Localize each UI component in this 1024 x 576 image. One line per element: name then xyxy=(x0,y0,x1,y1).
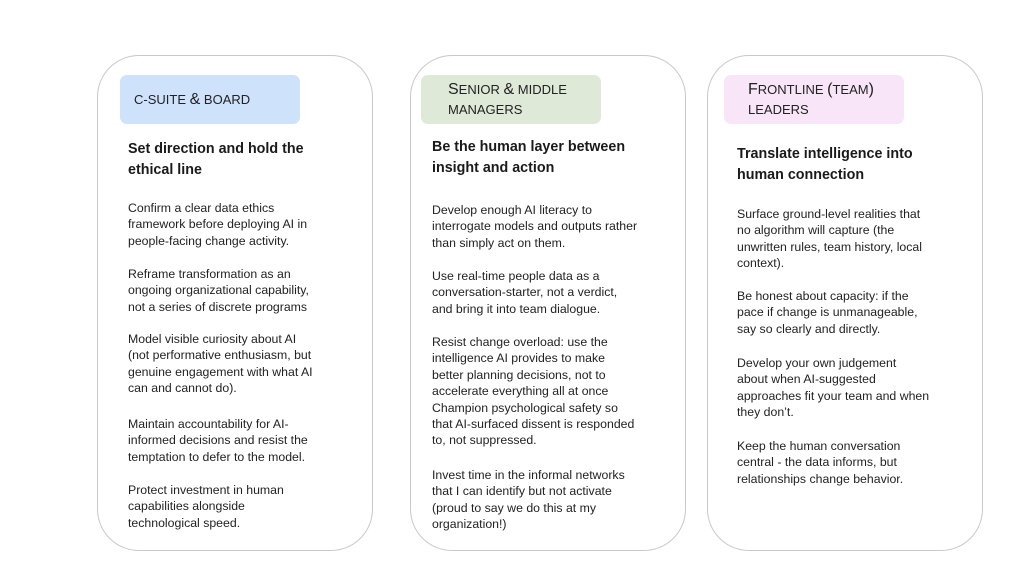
text: panel 2 items: organization!) xyxy=(432,517,507,531)
tag: frontline leaders xyxy=(724,75,904,124)
text: panel 3 items: relationships change behavior. xyxy=(737,472,903,486)
text: panel 2 items: Invest time in the informal networks xyxy=(432,468,625,482)
heading: panel 1: ethical line xyxy=(128,162,202,178)
text: panel 2 items: Resist change overload: use the xyxy=(432,335,608,349)
text: panel 2 items: Use real-time people data as a xyxy=(432,269,599,283)
text: panel 1 items xyxy=(128,201,313,530)
heading: panel 2 xyxy=(432,139,625,176)
text: panel 1 items: Protect investment in human xyxy=(128,483,284,497)
text: panel 1 items: informed decisions and resist the xyxy=(128,433,308,447)
text: panel 3 items: Develop your own judgement xyxy=(737,356,896,370)
text: panel 3 items: say so clearly and directly. xyxy=(737,322,880,336)
heading: panel 3: Translate intelligence into xyxy=(737,146,913,162)
heading: panel 2: Be the human layer between xyxy=(432,139,625,155)
text: panel 2 items: conversation-starter, not a verdict, xyxy=(432,285,617,299)
text: panel 3 items: Be honest about capacity: if the xyxy=(737,289,909,303)
text: panel 1 items: (not performative enthusiasm, but xyxy=(128,348,311,362)
tag: frontline leaders: FRONTLINE (TEAM) xyxy=(748,81,874,98)
text: panel 2 items xyxy=(432,203,637,531)
text: panel 1 items: can and cannot do). xyxy=(128,381,237,395)
text: panel 3 items: context). xyxy=(737,256,784,270)
text: panel 3 items: no algorithm will capture (the xyxy=(737,223,894,237)
panel: senior & middle managers xyxy=(410,55,686,551)
text: panel 2 items: and bring it into team dialogue. xyxy=(432,302,600,316)
text: panel 1 items: Confirm a clear data ethics xyxy=(128,201,274,215)
text: panel 3 items: unwritten rules, team history, local xyxy=(737,240,922,254)
text: panel 1 items: temptation to defer to the model. xyxy=(128,450,305,464)
text: panel 3 items: pace if change is unmanageable, xyxy=(737,305,918,319)
heading: panel 1 xyxy=(128,141,304,178)
heading: panel 3 xyxy=(737,146,913,182)
text: panel 1 items: framework before deploying AI in xyxy=(128,217,307,231)
text: panel 3 items: Keep the human conversation xyxy=(737,439,900,453)
tag: frontline leaders: LEADERS xyxy=(748,102,809,117)
text: panel 3 items xyxy=(737,207,929,486)
text: panel 1 items: Reframe transformation as an xyxy=(128,267,291,281)
text: panel 2 items: accelerate everything all at once xyxy=(432,384,608,398)
tag: senior & middle managers: SENIOR & MIDDLE xyxy=(448,81,567,98)
text: panel 1 items: technological speed. xyxy=(128,516,240,530)
text: panel 2 items: that I can identify but not activate xyxy=(432,484,612,498)
text: panel 2 items: interrogate models and outputs rather xyxy=(432,219,637,233)
text: panel 1 items: capabilities alongside xyxy=(128,499,245,513)
heading: panel 1: Set direction and hold the xyxy=(128,141,304,157)
text: panel 1 items: genuine engagement with what AI xyxy=(128,365,313,379)
text: panel 3 items: central - the data informs, but xyxy=(737,455,897,469)
text: panel 3 items: Surface ground-level realities that xyxy=(737,207,920,221)
text: panel 2 items: (proud to say we do this at my xyxy=(432,501,596,515)
text: panel 1 items: Model visible curiosity about AI xyxy=(128,332,296,346)
text: panel 2 items: Develop enough AI literacy to xyxy=(432,203,592,217)
text: panel 2 items: that AI-surfaced dissent is responded xyxy=(432,417,634,431)
tag: C-suite & board: C-SUITE & BOARD xyxy=(134,91,250,108)
panel: C-suite & board xyxy=(97,55,373,551)
text: panel 1 items: people-facing change activity. xyxy=(128,234,289,248)
text: panel 2 items: better planning decisions, not to xyxy=(432,368,606,382)
text: panel 2 items: than simply act on them. xyxy=(432,236,565,250)
text: panel 3 items: they don’t. xyxy=(737,405,794,419)
text: panel 2 items: Champion psychological safety so xyxy=(432,401,618,415)
tag: C-suite & board xyxy=(120,75,300,124)
text: panel 2 items: intelligence AI provides to make xyxy=(432,351,605,365)
text: panel 1 items: Maintain accountability for AI- xyxy=(128,417,289,431)
text: panel 2 items: to, not suppressed. xyxy=(432,433,537,447)
panel: frontline leaders xyxy=(707,55,983,551)
text: panel 3 items: approaches fit your team and when xyxy=(737,389,929,403)
heading: panel 2: insight and action xyxy=(432,160,554,176)
text: panel 1 items: not a series of discrete programs xyxy=(128,300,307,314)
text: panel 3 items: about when AI-suggested xyxy=(737,372,876,386)
tag: senior & middle managers: MANAGERS xyxy=(448,102,522,117)
text: panel 1 items: ongoing organizational capability, xyxy=(128,283,309,297)
tag: senior & middle managers xyxy=(421,75,601,124)
heading: panel 3: human connection xyxy=(737,166,864,182)
